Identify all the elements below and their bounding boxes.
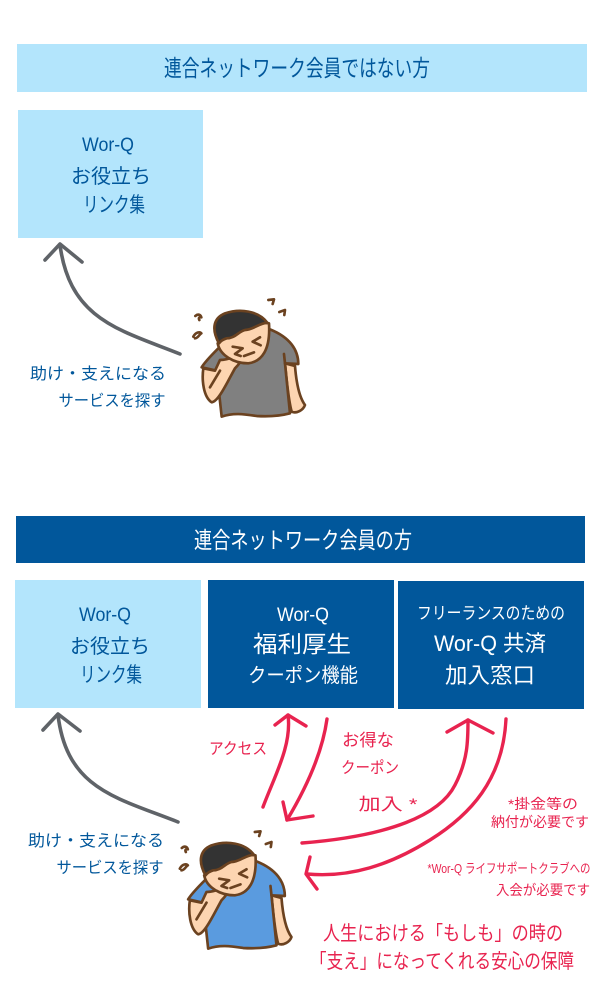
note: life support club membership required: 入会が必要です [496, 882, 590, 898]
box: Wor-Q welfare coupons [208, 580, 394, 708]
label: search for services: 助け・支えになる [30, 365, 166, 383]
icon: worried person in gray shirt [193, 299, 305, 417]
heading banner: non-members: 連合ネットワーク会員ではない方 [164, 55, 430, 81]
label: access: アクセス [209, 740, 267, 758]
panel: non-member section [17, 44, 587, 417]
label: search for services: サービスを探す [56, 859, 164, 877]
box: Wor-Q useful links [18, 110, 203, 238]
arrow: coupons back to person [283, 719, 327, 820]
label: discount coupon [341, 731, 399, 777]
box: Wor-Q mutual aid enrollment: 加入窓口 [445, 663, 535, 688]
box: Wor-Q welfare coupons: Wor-Q [277, 605, 329, 626]
note: premium payment required: *掛金等の [508, 796, 578, 812]
arrow: enroll up to mutual aid [302, 720, 493, 843]
box: Wor-Q mutual aid enrollment: Wor-Q 共済 [434, 631, 546, 656]
label: search for services [28, 832, 164, 877]
text: reassurance message: 人生における「もしも」の時の [323, 922, 563, 945]
note: premium payment required [491, 796, 589, 830]
panel: member section [15, 516, 590, 973]
arrow: gray curved up to links [43, 714, 178, 822]
label: search for services: 助け・支えになる [28, 832, 164, 850]
label: discount coupon: お得な [342, 731, 394, 750]
box: Wor-Q useful links: Wor-Q [82, 135, 134, 156]
box: Wor-Q useful links: リンク集 [83, 194, 145, 217]
box: Wor-Q useful links [15, 580, 201, 708]
heading banner: members: 連合ネットワーク会員の方 [194, 527, 412, 553]
box: Wor-Q useful links: お役立ち [71, 165, 151, 188]
label: enroll: 加入 * [358, 795, 418, 814]
box: Wor-Q mutual aid enrollment [398, 581, 584, 709]
note: life support club membership required [428, 861, 590, 898]
heading banner: non-members [17, 44, 587, 92]
box: Wor-Q welfare coupons: 福利厚生 [253, 631, 351, 657]
label: search for services [30, 365, 166, 410]
box: Wor-Q useful links: リンク集 [80, 664, 142, 687]
box: Wor-Q mutual aid enrollment: フリーランスのための [417, 604, 565, 623]
label: discount coupon: クーポン [341, 759, 399, 777]
box: Wor-Q useful links: Wor-Q [79, 605, 131, 626]
box: Wor-Q useful links: お役立ち [70, 635, 150, 658]
label: search for services: サービスを探す [58, 392, 166, 410]
note: premium payment required: 納付が必要です [491, 814, 589, 830]
text: reassurance message [310, 922, 574, 973]
box: Wor-Q welfare coupons: クーポン機能 [248, 664, 358, 687]
arrow: access up to coupons [263, 715, 306, 807]
heading banner: members [16, 516, 585, 563]
icon: worried person in blue shirt [180, 831, 291, 949]
arrow: mutual aid back to person [306, 719, 506, 889]
arrow: gray curved up to links [45, 244, 180, 354]
